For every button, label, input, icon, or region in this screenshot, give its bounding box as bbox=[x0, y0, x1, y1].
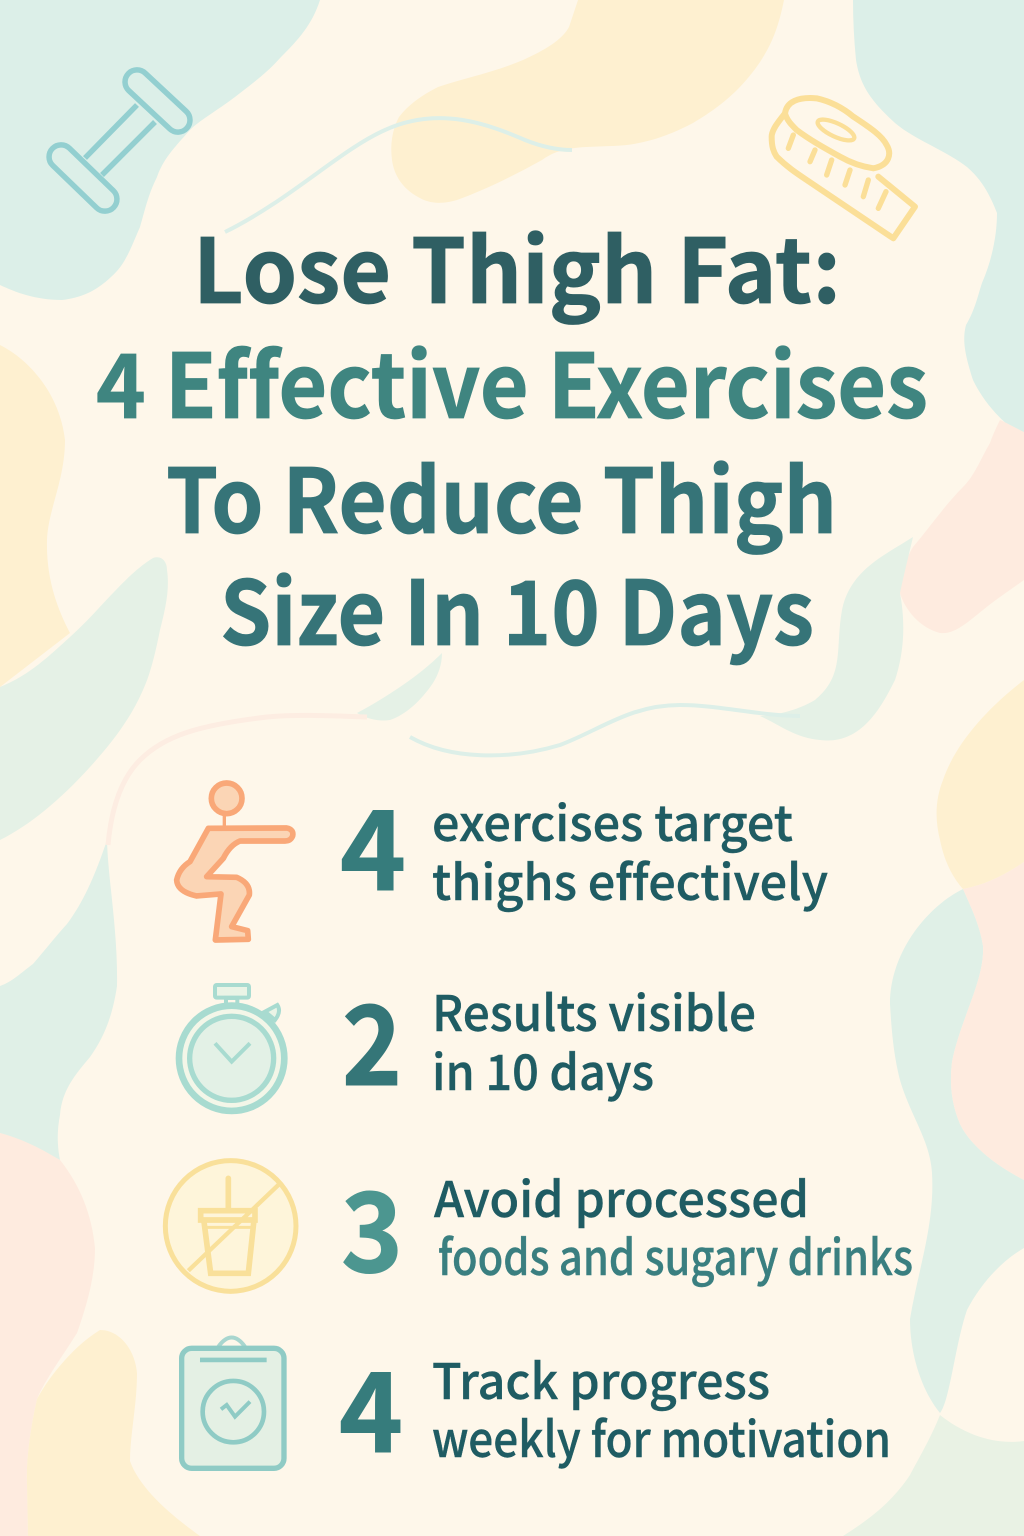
text line 1: exercises target bbox=[432, 785, 793, 856]
number: 3 bbox=[341, 1144, 403, 1304]
text line 2: thighs effectively bbox=[432, 844, 828, 915]
number: 4 bbox=[339, 1324, 403, 1484]
icon: no sugary drinks bbox=[165, 1161, 296, 1291]
icon: clipboard tracker bbox=[182, 1337, 284, 1468]
text line 2: weekly for motivation bbox=[432, 1401, 891, 1472]
title line 4: Size In 10 Days bbox=[220, 542, 814, 671]
icon: stopwatch bbox=[179, 985, 284, 1111]
text line 1: Avoid processed bbox=[434, 1161, 809, 1232]
icon: squat figure bbox=[177, 783, 293, 940]
text line 2: in 10 days bbox=[432, 1034, 654, 1105]
title line 2: 4 Effective Exercises bbox=[96, 315, 928, 444]
title line 3: To Reduce Thigh bbox=[166, 430, 837, 559]
title bbox=[96, 200, 928, 671]
text line 2: foods and sugary drinks bbox=[438, 1219, 913, 1290]
number: 4 bbox=[340, 762, 406, 922]
text line 1: Results visible bbox=[432, 975, 756, 1046]
number: 2 bbox=[342, 957, 402, 1117]
panel: stat row 3 bbox=[165, 1144, 913, 1304]
icon: measuring tape bbox=[772, 98, 915, 238]
panel: stat row 1 bbox=[177, 762, 828, 940]
icon: dumbbell bbox=[44, 65, 195, 216]
panel: stat row 2 bbox=[179, 957, 756, 1117]
text line 1: Track progress bbox=[432, 1343, 770, 1414]
title line 1: Lose Thigh Fat: bbox=[193, 200, 841, 329]
panel: stat row 4 bbox=[182, 1324, 891, 1484]
